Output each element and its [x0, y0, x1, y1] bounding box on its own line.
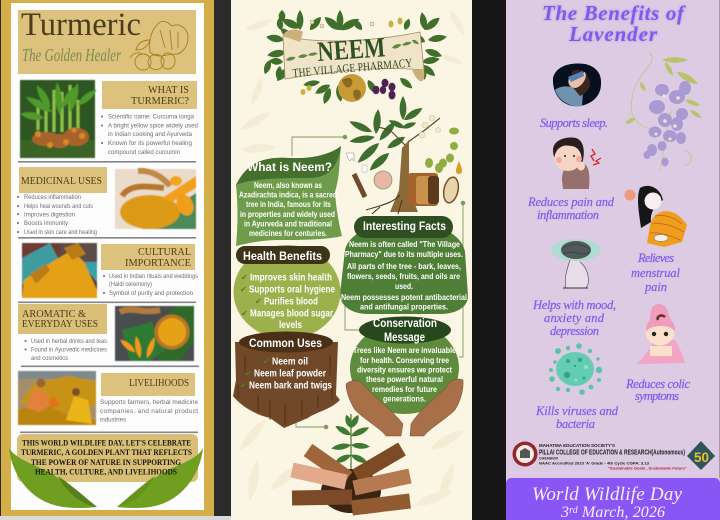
- panel: turmeric poster: [0, 0, 231, 520]
- turmeric title banner: [18, 7, 196, 74]
- text: helps with mood: depression: [550, 324, 599, 338]
- college logo line: CHEMBUR: [539, 456, 558, 460]
- heading: livelihoods: LIVELIHOODS: [129, 377, 189, 389]
- photo: turmeric powder and roots: [115, 169, 197, 229]
- panel: health benefits: [234, 245, 340, 339]
- panel: interesting facts: and antifungal properties.: [360, 302, 448, 312]
- icon: virus: [549, 343, 602, 395]
- panel: interesting facts: Pharmacy" due to its multiple uses.: [345, 249, 463, 259]
- panel: what is neem: Neem, also known as: [254, 180, 322, 190]
- icon: neem oil drop: [456, 161, 462, 174]
- panel: lavender poster: [506, 0, 720, 520]
- callout: closing message: TURMERIC, A GOLDEN PLANT THAT REFLECTS: [21, 448, 192, 457]
- panel: health benefits: ✔: [255, 297, 262, 306]
- icon: golden globe: [338, 74, 366, 102]
- heading: what is turmeric: WHAT IS: [148, 84, 189, 96]
- icon: girl with period pain: [624, 186, 687, 247]
- heading: what is turmeric: [102, 81, 197, 109]
- photo: turmeric bowl on leaves: [115, 306, 194, 361]
- text: kills viruses and bacteria: [535, 404, 619, 431]
- text: reduces colic symptoms: symptoms: [635, 389, 679, 403]
- panel: common uses stump: Neem leaf powder: [254, 368, 326, 380]
- icon: sleeping woman: [553, 64, 601, 106]
- header: neem ribbon with leaves: [262, 10, 447, 105]
- heading: medicinal uses: [19, 167, 107, 193]
- panel: interesting facts: [340, 216, 468, 314]
- panel: common uses stump: Neem oil: [272, 356, 308, 368]
- text: relieves menstrual pain: [631, 251, 681, 294]
- heading: livelihoods: [101, 373, 195, 396]
- header: neem ribbon with leaves: NEEM: [316, 32, 386, 68]
- heading: aromatic and everyday uses: AROMATIC &: [22, 308, 86, 320]
- panel: common uses stump: Common Uses: [249, 338, 322, 350]
- list: cultural importance: (Haldi ceremony): [109, 281, 152, 288]
- text: reduces pain and inflammation: inflammation: [537, 208, 599, 222]
- footer: world wildlife day: World Wildlife Day: [532, 484, 683, 505]
- panel: conservation message: for health. Conserving tree: [360, 355, 449, 365]
- heading: cultural importance: IMPORTANCE: [125, 257, 191, 269]
- text: kills viruses and bacteria: bacteria: [556, 417, 595, 431]
- icon: woman with neck pain: [553, 138, 601, 189]
- leaf decoration right: [117, 448, 203, 508]
- callout: closing message: HEALTH, CULTURE, AND LIVELIHOODS: [35, 468, 177, 476]
- heading: aromatic and everyday uses: EVERYDAY USES: [22, 318, 98, 330]
- heading: cultural importance: [101, 244, 195, 270]
- list: aromatic uses: [24, 338, 107, 362]
- list: what is turmeric: [101, 114, 198, 156]
- panel: health benefits: levels: [279, 320, 302, 331]
- panel: common uses stump: ✔: [245, 369, 252, 378]
- photo: ritual turmeric heap: [22, 243, 97, 298]
- panel: interesting facts: Interesting Facts: [363, 221, 446, 233]
- panel: health benefits: Health Benefits: [243, 251, 322, 263]
- text: reduces pain and inflammation: [527, 195, 615, 222]
- illustration: wisteria: [624, 52, 703, 170]
- turmeric title banner: The Golden Healer: [22, 45, 122, 65]
- heading: what is turmeric: TURMERIC?: [131, 95, 189, 107]
- text: helps with mood: Helps with mood,: [532, 298, 616, 312]
- text: relieves menstrual pain: menstrual: [631, 266, 681, 280]
- icon: bark cross-section: [408, 173, 439, 206]
- photo: turmeric plants: [20, 80, 99, 158]
- list: medicinal uses: Helps heal wounds and cuts: [24, 203, 93, 210]
- list: medicinal uses: [17, 194, 97, 236]
- icon: anxious mind sketch: [551, 239, 601, 288]
- text: livelihoods: [100, 399, 198, 424]
- illustration: hands holding seedling: [292, 414, 410, 513]
- text: supports sleep: Supports sleep.: [540, 116, 608, 130]
- photo: farmers with turmeric: [18, 371, 96, 425]
- panel: interesting facts: All parts of the tree - bark, leaves,: [347, 261, 461, 271]
- list: what is turmeric: Known for its powerful healing: [108, 140, 192, 147]
- text: helps with mood: [532, 298, 616, 338]
- panel: interesting facts: Neem is often called "The Village: [349, 239, 460, 249]
- panel: conservation message: diversity ensures we protect: [357, 364, 452, 374]
- text: livelihoods: industries: [100, 416, 126, 424]
- icon: neem berries: [372, 79, 396, 100]
- text: reduces colic symptoms: Reduces colic: [625, 377, 690, 391]
- list: aromatic uses: Used in herbal drinks and teas: [31, 338, 107, 345]
- panel: interesting facts: used.: [395, 281, 413, 291]
- title: benefits of lavender: The Benefits of: [542, 1, 686, 25]
- illustration: neem tree: [346, 96, 462, 214]
- panel: what is neem: What is Neem?: [247, 162, 332, 174]
- panel: conservation message: remedies for future: [372, 384, 437, 394]
- list: what is turmeric: Scientific name: Curcuma longa: [108, 114, 194, 120]
- text: relieves menstrual pain: Relieves: [637, 251, 674, 265]
- list: medicinal uses: Improves digestion: [24, 212, 75, 218]
- icon: college seal: [512, 442, 538, 466]
- list: aromatic uses: and cosmetics: [31, 355, 68, 362]
- panel: what is neem: in Ayurveda and traditional: [244, 218, 332, 228]
- panel: what is neem: medicines for centuries.: [249, 228, 327, 238]
- list: cultural importance: Used in Indian rituals and weddings: [109, 273, 198, 280]
- panel: interesting facts: Neem possesses potent antibacterial: [341, 292, 467, 302]
- panel: neem poster: [231, 0, 472, 520]
- list: what is turmeric: compound called curcumin: [108, 149, 180, 156]
- text: livelihoods: Supports farmers, herbal medicine: [100, 399, 198, 406]
- list: what is turmeric: in Indian cooking and Ayurveda: [108, 131, 192, 138]
- icon: baby in pink towel: [637, 304, 685, 364]
- leaf decoration left: [9, 448, 97, 508]
- title: benefits of lavender: Lavender: [568, 22, 658, 46]
- list: cultural importance: Symbol of purity and protection: [109, 290, 193, 297]
- callout: closing message: THE POWER OF NATURE IN SUPPORTING: [31, 458, 181, 467]
- callout: closing message: [9, 434, 203, 508]
- illustration: cupped hands: [346, 379, 463, 436]
- list: cultural importance: [103, 273, 198, 297]
- list: what is turmeric: A bright yellow spice widely used: [108, 122, 198, 130]
- panel: conservation message: these powerful natural: [366, 374, 443, 384]
- panel: conservation message: [346, 316, 463, 436]
- turmeric title banner: Turmeric: [21, 7, 141, 43]
- college logo line: [512, 441, 715, 470]
- panel: health benefits: ✔: [241, 309, 248, 318]
- panel: what is neem: Azadirachta indica, is a sacred: [239, 190, 337, 200]
- heading: aromatic and everyday uses: [18, 304, 107, 334]
- heading: cultural importance: CULTURAL: [138, 246, 191, 258]
- panel: conservation message: generations.: [383, 394, 426, 404]
- panel: interesting facts: flowers, seeds, fruits, and oils are: [347, 271, 460, 281]
- panel: health benefits: Purifies blood: [264, 296, 318, 308]
- icon: seed: [441, 176, 461, 204]
- college logo line: MAHATMA EDUCATION SOCIETY'S: [539, 443, 615, 448]
- text: helps with mood: anxiety and: [544, 311, 605, 325]
- college logo line: NAAC Accredited 2023 'A' Grade - 4th Cycle CGPA: 3.13: [539, 460, 650, 466]
- icon: neem twig: [354, 174, 365, 197]
- panel: health benefits: ✔: [240, 285, 247, 294]
- panel: what is neem: [236, 146, 342, 246]
- panel: common uses stump: ✔: [263, 357, 270, 366]
- panel: health benefits: ✔: [241, 273, 248, 282]
- heading: medicinal uses: MEDICINAL USES: [21, 175, 102, 187]
- text: kills viruses and bacteria: Kills viruses and: [535, 404, 619, 418]
- list: aromatic uses: Found in Ayurvedic medicines: [31, 346, 107, 354]
- callout: closing message: THIS WORLD WILDLIFE DAY, LET'S CELEBRATE: [22, 438, 191, 448]
- text: relieves menstrual pain: pain: [644, 280, 667, 294]
- panel: common uses stump: Neem bark and twigs: [249, 380, 332, 392]
- icon: 50 years badge: 50: [694, 449, 709, 465]
- panel: health benefits: Improves skin health: [250, 272, 332, 284]
- text: livelihoods: companies, and natural product: [100, 408, 198, 415]
- panel: health benefits: Supports oral hygiene: [249, 284, 335, 296]
- panel: what is neem: in properties and widely used: [240, 209, 335, 219]
- icon: skin close-up: [374, 171, 392, 189]
- panel: what is neem: tree in India, famous for its: [246, 199, 331, 209]
- title: benefits of lavender: The Benefits of: [542, 1, 686, 25]
- panel: common uses stump: [233, 332, 340, 428]
- panel: conservation message: Trees like Neem are invaluable: [353, 345, 456, 355]
- icon: tooth: [346, 153, 354, 161]
- list: medicinal uses: Used in skin care and healing: [24, 229, 97, 236]
- panel: conservation message: Message: [384, 332, 425, 344]
- college logo line: "Sustainable Goals , Sustainable Future": [608, 466, 687, 470]
- panel: common uses stump: ✔: [240, 381, 247, 390]
- title: benefits of lavender: Lavender: [568, 22, 658, 46]
- header: neem ribbon with leaves: THE VILLAGE PHARMACY: [292, 56, 413, 80]
- panel: health benefits: Manages blood sugar: [250, 308, 333, 320]
- icon: 50 years badge: [687, 441, 715, 470]
- footer: world wildlife day: [506, 478, 720, 520]
- list: medicinal uses: Boosts immunity: [24, 220, 69, 227]
- footer: world wildlife day: rd: [569, 505, 579, 516]
- text: reduces pain and inflammation: Reduces pain and: [527, 195, 615, 209]
- text: reduces colic symptoms: [625, 377, 690, 403]
- panel: conservation message: Conservation: [373, 318, 437, 330]
- connector lines: [292, 135, 465, 429]
- title: benefits of lavender: [542, 1, 686, 46]
- list: medicinal uses: Reduces inflammation: [24, 194, 81, 201]
